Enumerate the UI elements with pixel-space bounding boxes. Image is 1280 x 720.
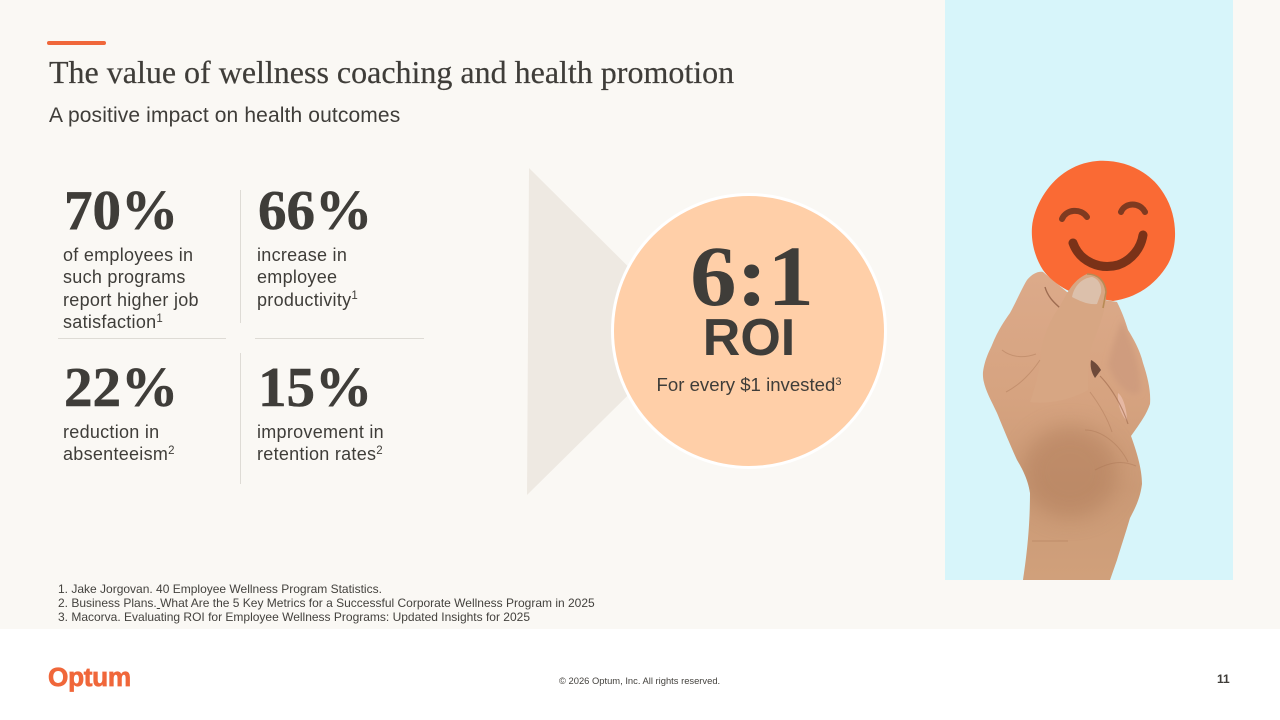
subtitle: A positive impact on health outcomes xyxy=(49,104,400,127)
stat: 66 percent: employee xyxy=(257,267,337,287)
stat: 70 percent: satisfaction1 xyxy=(63,312,163,332)
smiley disc xyxy=(1032,161,1175,301)
stat: 22 percent: 22% xyxy=(64,357,178,419)
hand xyxy=(983,272,1150,580)
accent bar xyxy=(47,41,106,45)
stat: 22 percent: absenteeism2 xyxy=(63,444,175,464)
stat: 66 percent xyxy=(257,180,372,310)
stat: 70 percent: report higher job xyxy=(63,290,199,310)
page number: 11 xyxy=(1217,672,1230,686)
stat: 70 percent xyxy=(63,180,199,332)
Optum logo: Optum xyxy=(48,662,131,692)
title: The value of wellness coaching and health promotion xyxy=(49,54,734,90)
panel: statistics grid xyxy=(58,180,424,484)
stat: 70 percent: 70% xyxy=(64,180,178,242)
stat: 70 percent: such programs xyxy=(63,267,186,287)
stat: 15 percent: improvement in xyxy=(257,422,384,442)
stat: 22 percent: reduction in xyxy=(63,422,159,442)
image: hand holding smiley xyxy=(982,160,1176,580)
panel: ROI circle xyxy=(611,193,887,469)
panel: pale blue image background xyxy=(945,0,1233,580)
thumb xyxy=(1030,274,1106,403)
footnotes: 1. Jake Jorgovan. 40 Employee Wellness Program Statistics. xyxy=(58,582,382,596)
ROI label: ROI xyxy=(703,309,795,367)
ROI ratio: 6:1 xyxy=(690,228,814,324)
ROI caption: For every $1 invested3 xyxy=(657,374,841,395)
copyright: © 2026 Optum, Inc. All rights reserved. xyxy=(559,675,720,686)
stat: 66 percent: productivity1 xyxy=(257,290,358,310)
stat: 70 percent: of employees in xyxy=(63,245,193,265)
stat: 66 percent: 66% xyxy=(258,180,372,242)
stat: 22 percent xyxy=(63,357,178,464)
arrow: triangle pointing to ROI circle xyxy=(527,168,628,495)
stat: 15 percent: retention rates2 xyxy=(257,444,383,464)
footnotes: 3. Macorva. Evaluating ROI for Employee Wellness Programs: Updated Insights for 2025 xyxy=(58,610,530,624)
stat: 15 percent: 15% xyxy=(258,357,372,419)
footnotes xyxy=(58,582,595,624)
footnotes: 2. Business Plans. What Are the 5 Key Metrics for a Successful Corporate Wellness Program in 2025 xyxy=(58,596,595,610)
stat: 66 percent: increase in xyxy=(257,245,347,265)
stat: 15 percent xyxy=(257,357,384,464)
